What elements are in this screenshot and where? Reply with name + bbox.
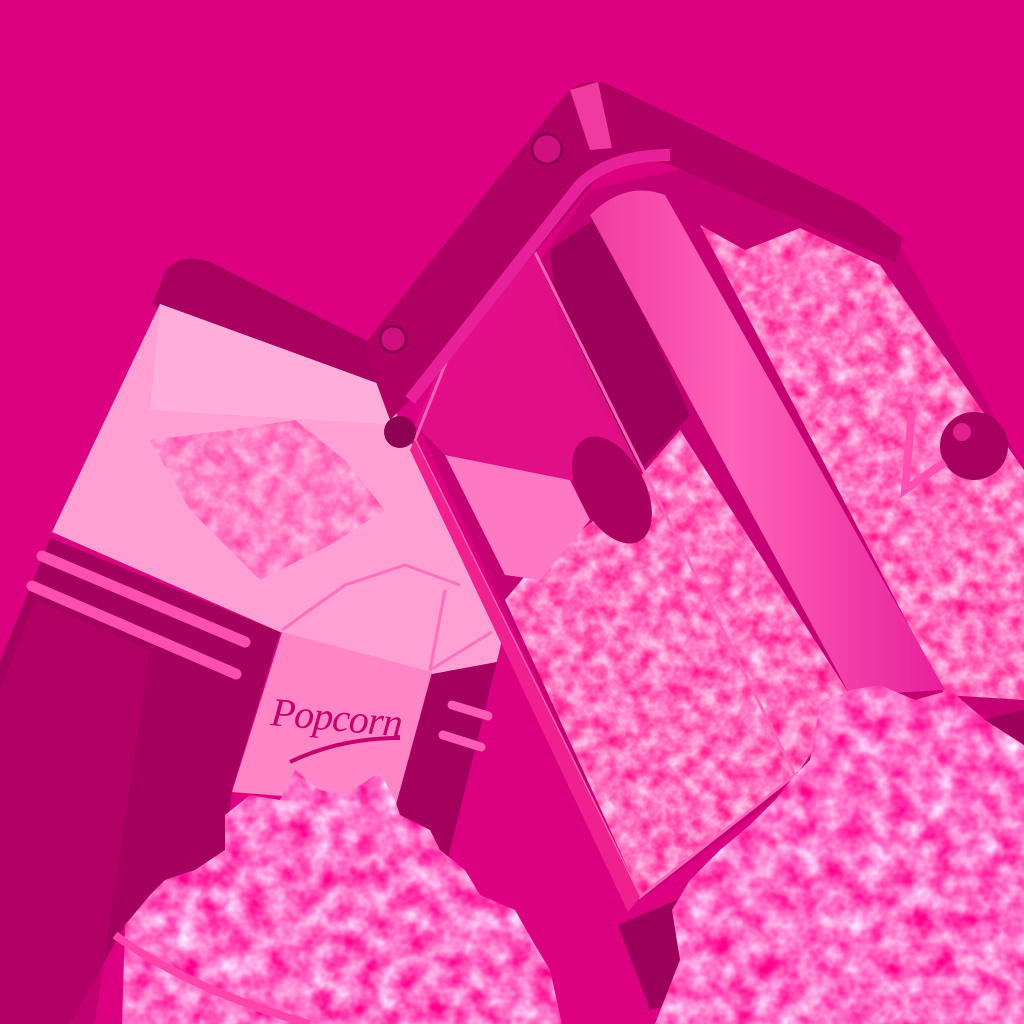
pile texture — [650, 680, 1024, 1024]
bowl rim — [115, 935, 310, 1024]
ball handle — [940, 412, 1008, 480]
base highlight — [0, 600, 150, 1024]
dark interior — [550, 215, 690, 470]
door hinge — [384, 416, 416, 448]
bottom dark foot — [618, 888, 705, 1010]
right dark base — [396, 662, 497, 890]
chrome ring lower — [32, 586, 236, 674]
door glass upper tint — [415, 205, 640, 480]
handle arm — [905, 410, 945, 490]
left machine chamber — [52, 304, 502, 690]
left machine popcorn inside — [150, 420, 385, 580]
cap screw top — [532, 134, 562, 164]
pile texture — [110, 760, 570, 1024]
left popcorn machine — [0, 259, 502, 1024]
left popcorn pile — [110, 760, 570, 1024]
door bottom edge — [410, 440, 640, 912]
cap top highlight — [570, 82, 612, 150]
chrome ring upper — [42, 556, 245, 642]
left machine dark base — [0, 538, 280, 1024]
left machine chamber shade — [150, 304, 400, 425]
right popcorn machine — [366, 82, 1024, 1010]
left machine dark cap — [152, 259, 385, 395]
front chamber popcorn — [500, 425, 855, 900]
brand swash — [290, 738, 400, 762]
center label panel — [232, 632, 432, 805]
door glass bright patch — [445, 455, 590, 580]
central column — [590, 190, 945, 695]
small chrome ring bottom — [443, 735, 481, 747]
large popcorn pile — [650, 680, 1024, 1024]
top cap — [366, 82, 903, 420]
small chrome ring top — [452, 705, 488, 716]
chamber dark back — [420, 165, 1024, 900]
foot right corner — [975, 710, 1024, 745]
door outline — [415, 202, 795, 897]
knob on door — [556, 423, 668, 557]
brand text: Popcorn — [268, 689, 405, 745]
cap screw left — [380, 326, 406, 352]
cap rim — [410, 155, 670, 400]
chute outline — [282, 565, 492, 670]
ball highlight — [953, 423, 971, 441]
right chamber popcorn — [695, 225, 1024, 705]
